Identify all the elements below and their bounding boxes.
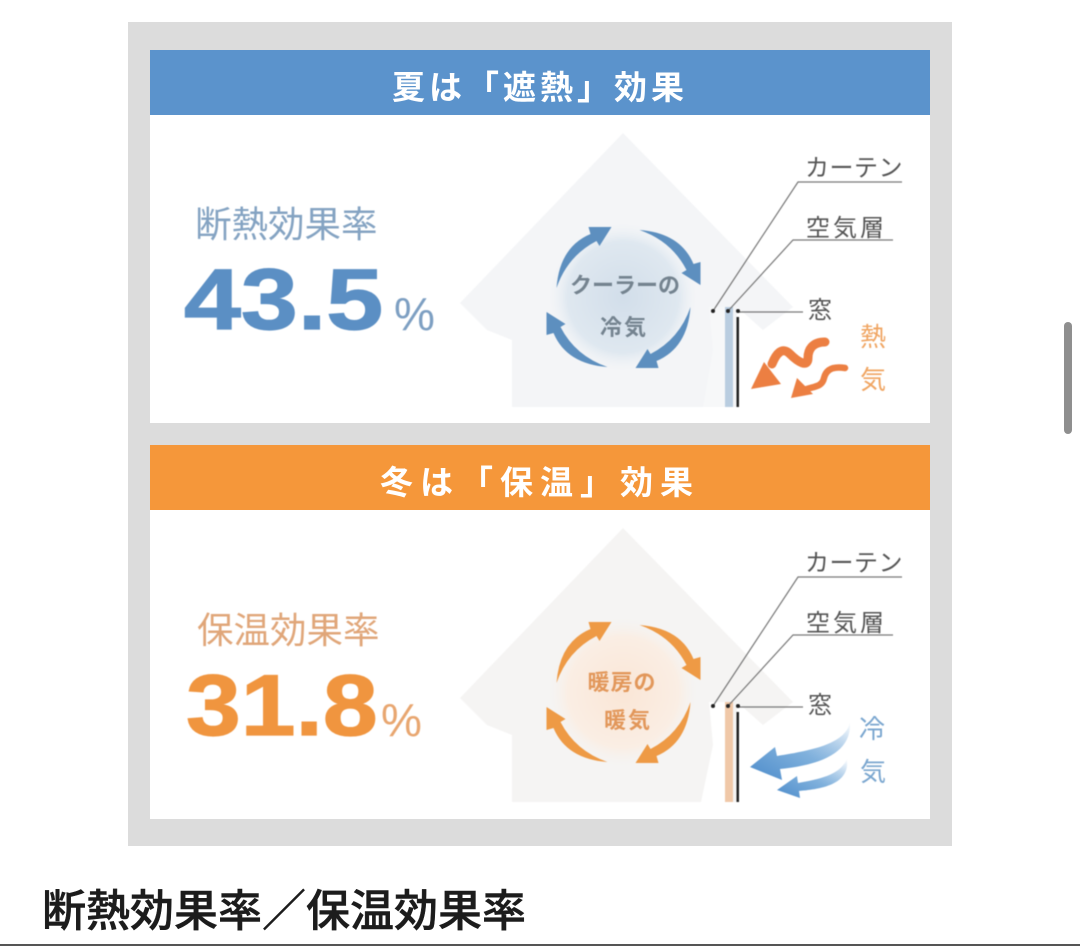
callout labels: 空気層 — [806, 610, 887, 637]
number: 43.5: 43.5 — [184, 252, 383, 348]
number: 31.8: 31.8 — [186, 658, 378, 754]
heat waves — [772, 342, 845, 391]
panel: gray background card — [128, 22, 952, 846]
heat arrowheads — [751, 362, 813, 398]
cold label: 気 — [860, 757, 886, 787]
heading: summer: 夏は「遮熱」効果 — [392, 69, 688, 106]
house silhouette — [460, 133, 793, 407]
leader lines — [713, 182, 902, 312]
heat label — [860, 322, 886, 395]
panel: summer heat shielding — [150, 50, 930, 423]
callout labels — [805, 155, 903, 324]
cold label — [859, 714, 886, 787]
circulating arrows — [546, 622, 700, 763]
window — [736, 317, 739, 407]
cold label: 冷 — [859, 714, 885, 744]
center label: クーラーの — [570, 273, 680, 298]
center label — [587, 670, 657, 733]
unit: percent: % — [394, 288, 435, 340]
heading: summer — [150, 50, 930, 115]
cold air arrows — [750, 722, 850, 798]
warm air glow — [549, 618, 697, 766]
center label: 暖気 — [604, 708, 652, 733]
panel: winter heat retention — [150, 445, 930, 819]
circulating arrows — [546, 227, 700, 368]
diagram: summer house — [461, 134, 903, 408]
window — [736, 712, 739, 802]
center label: 冷気 — [600, 315, 648, 340]
heat label: 気 — [860, 365, 886, 395]
curtain — [725, 307, 733, 407]
title: caption: 断熱効果率／保温効果率 — [42, 875, 526, 939]
cool air glow — [549, 223, 697, 371]
callout labels: カーテン — [805, 155, 903, 182]
callout labels: 空気層 — [806, 215, 887, 242]
white exterior wedge — [701, 702, 725, 802]
house silhouette — [460, 528, 793, 802]
diagram: winter house — [461, 529, 903, 803]
heading: winter: 冬は「保温」効果 — [380, 464, 700, 501]
rule: bottom line — [0, 944, 1080, 946]
heat label: 熱 — [860, 322, 886, 352]
callout labels: 窓 — [808, 692, 832, 719]
unit: percent: % — [381, 694, 422, 746]
label: retention rate: 保温効果率 — [197, 610, 380, 651]
callout labels: カーテン — [805, 550, 903, 577]
white exterior wedge — [703, 307, 725, 407]
curtain — [725, 702, 733, 802]
callout labels: 窓 — [808, 297, 832, 324]
scrollbar — [1064, 322, 1072, 434]
center label: 暖房の — [587, 670, 657, 695]
leader lines — [713, 577, 902, 707]
label: insulation rate: 断熱効果率 — [195, 204, 378, 245]
heading: winter — [150, 445, 930, 510]
callout labels — [805, 550, 903, 719]
center label — [570, 273, 680, 340]
